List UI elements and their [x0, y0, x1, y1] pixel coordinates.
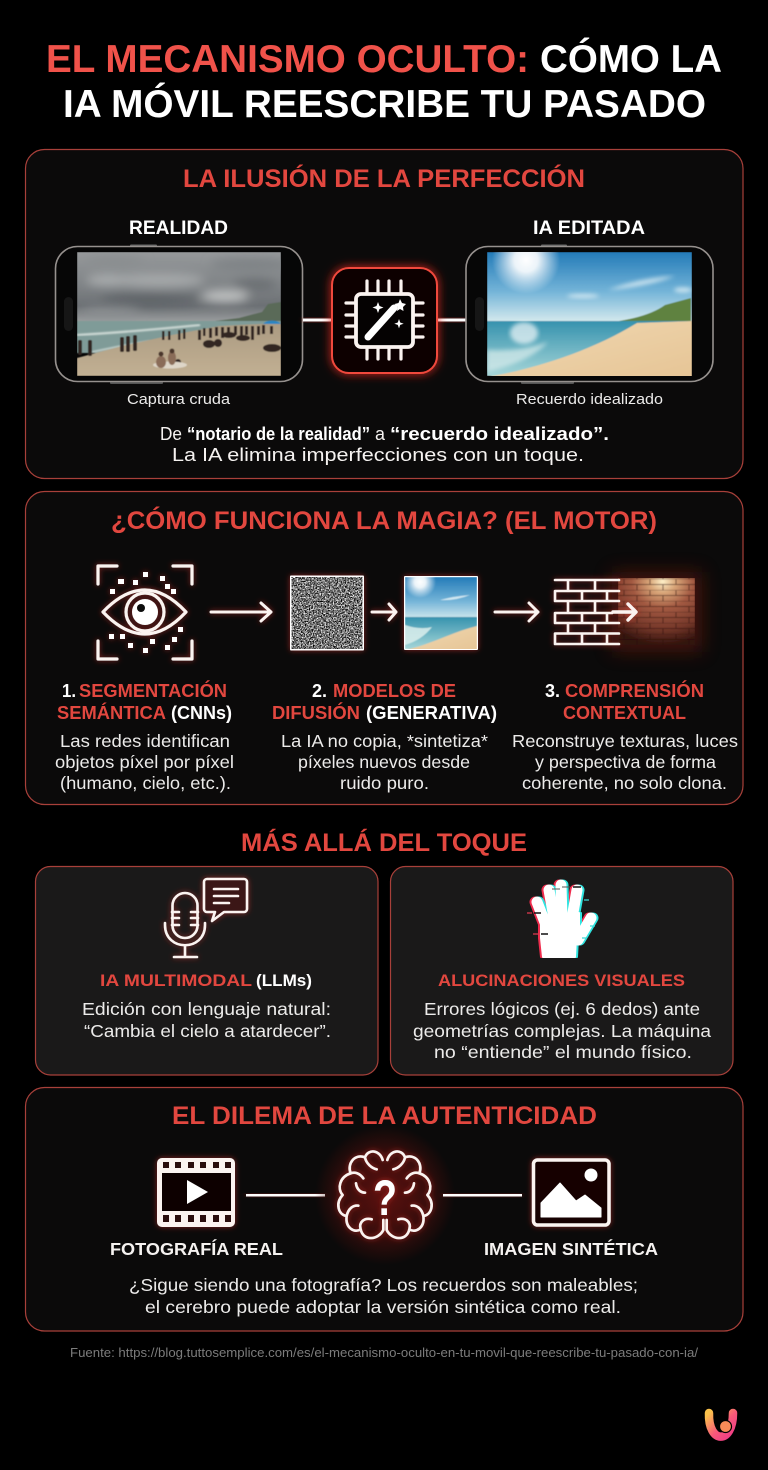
- step 2: DIFUSIÓN: [272, 702, 360, 723]
- noise square: [290, 576, 364, 650]
- icon: microphone and speech bubble: [165, 879, 247, 957]
- text: descripción de la ilusión: a: [375, 424, 386, 444]
- label: IA editada: IA EDITADA: [533, 218, 645, 239]
- line right: [443, 1194, 522, 1196]
- heading: más allá del toque: MÁS ALLÁ DEL TOQUE: [241, 828, 527, 857]
- step 3: COMPRENSIÓN: [565, 680, 704, 701]
- card text: Errores lógicos (ej. 6 dedos) ante: [424, 999, 700, 1019]
- card heading: [100, 971, 312, 990]
- phone: captura real de playa: [56, 244, 302, 384]
- connector left: [303, 318, 331, 322]
- card text: [82, 999, 331, 1041]
- label: fotografía real: FOTOGRAFÍA REAL: [110, 1238, 283, 1259]
- step 2: MODELOS DE: [333, 681, 456, 701]
- heading: la ilusión: LA ILUSIÓN DE LA PERFECCIÓN: [183, 163, 585, 193]
- text: descripción de la ilusión: “notario de la realidad”: [187, 424, 370, 444]
- heading: dilema: EL DILEMA DE LA AUTENTICIDAD: [172, 1102, 597, 1130]
- arrow 2: [372, 604, 396, 620]
- title: EL MECANISMO OCULTO:: [46, 38, 529, 81]
- icon: chip with magic wand: [332, 268, 437, 373]
- card text: no “entiende” el mundo físico.: [434, 1042, 692, 1062]
- step 2: ruido puro.: [340, 773, 429, 793]
- panel: la ilusión de la perfección: [26, 150, 743, 478]
- card heading: (LLMs): [256, 971, 312, 990]
- panel: el dilema de la autenticidad: [26, 1088, 743, 1331]
- step 1: [55, 680, 234, 793]
- text: dilema: el cerebro puede adoptar la versión sintética como real.: [145, 1297, 621, 1317]
- card: alucinaciones visuales: [390, 866, 733, 1075]
- step 3: [512, 680, 738, 793]
- text: descripción de la ilusión: De: [160, 424, 182, 444]
- step 1: SEGMENTACIÓN: [79, 680, 227, 701]
- card text: geometrías complejas. La máquina: [413, 1021, 711, 1041]
- step 2: (GENERATIVA): [366, 703, 497, 723]
- caption: recuerdo idealizado: Recuerdo idealizado: [516, 391, 663, 408]
- step 2: [272, 681, 497, 793]
- title: [46, 37, 722, 126]
- text: dilema: ¿Sigue siendo una fotografía? Los recuerdos son maleables;: [129, 1275, 638, 1295]
- step 1: 1.: [62, 681, 76, 701]
- phone: playa editada por IA: [465, 244, 714, 384]
- brick wall outline: [555, 580, 636, 644]
- logo: [709, 1413, 733, 1437]
- icon: brain with question mark: ?: [373, 1170, 397, 1226]
- text: descripción de la ilusión: La IA elimina imperfecciones con un toque.: [172, 445, 584, 465]
- step 2: 2.: [312, 681, 327, 701]
- panel: cómo funciona la magia: [26, 492, 743, 804]
- step 3: y perspectiva de forma: [535, 752, 716, 772]
- card heading: IA MULTIMODAL: [100, 971, 252, 990]
- step 2: La IA no copia, *sintetiza*: [281, 731, 488, 751]
- step 1: Las redes identifican: [60, 731, 230, 751]
- step 1: SEMÁNTICA: [57, 702, 166, 723]
- icon: glitched hand: [527, 885, 595, 957]
- step 1: objetos píxel por píxel: [55, 752, 234, 772]
- title: IA MÓVIL REESCRIBE TU PASADO: [63, 82, 706, 126]
- card text: Edición con lenguaje natural:: [82, 999, 331, 1019]
- card: IA multimodal: [36, 866, 378, 1075]
- lit brick wall: [612, 572, 702, 652]
- step 1: (humano, cielo, etc.).: [60, 773, 231, 793]
- step 3: coherente, no solo clona.: [522, 773, 727, 793]
- label: imagen sintética: IMAGEN SINTÉTICA: [484, 1238, 658, 1259]
- step 3: 3.: [545, 681, 560, 701]
- title: CÓMO LA: [540, 37, 722, 81]
- card heading: ALUCINACIONES VISUALES: [438, 971, 685, 990]
- text: descripción de la ilusión: [160, 424, 609, 465]
- step 3: CONTEXTUAL: [563, 703, 686, 723]
- card text: [413, 999, 711, 1062]
- label: realidad: REALIDAD: [129, 218, 228, 239]
- icon: eye scan: [98, 566, 192, 659]
- text: dilema: [129, 1275, 638, 1317]
- connector right: [437, 318, 466, 322]
- text: descripción de la ilusión: “recuerdo idealizado”.: [390, 424, 609, 444]
- generated beach image: [404, 566, 478, 650]
- line left: [246, 1194, 325, 1196]
- step 1: (CNNs): [171, 703, 232, 723]
- card text: “Cambia el cielo a atardecer”.: [84, 1021, 331, 1041]
- icon: brain with question mark: [315, 1125, 455, 1265]
- source: Fuente: https://blog.tuttosemplice.com/es/el-mecanismo-oculto-en-tu-movil-que-reescribe-tu-pasado-con-ia/: [70, 1346, 699, 1360]
- heading: el motor: ¿CÓMO FUNCIONA LA MAGIA? (EL MOTOR): [111, 505, 657, 535]
- arrow 1: [211, 603, 271, 621]
- caption: captura cruda: Captura cruda: [127, 391, 231, 408]
- step 3: Reconstruye texturas, luces: [512, 731, 738, 751]
- icon: image: [534, 1160, 609, 1225]
- step 2: píxeles nuevos desde: [298, 752, 470, 772]
- icon: film: [157, 1158, 235, 1227]
- arrow 3: [495, 603, 538, 621]
